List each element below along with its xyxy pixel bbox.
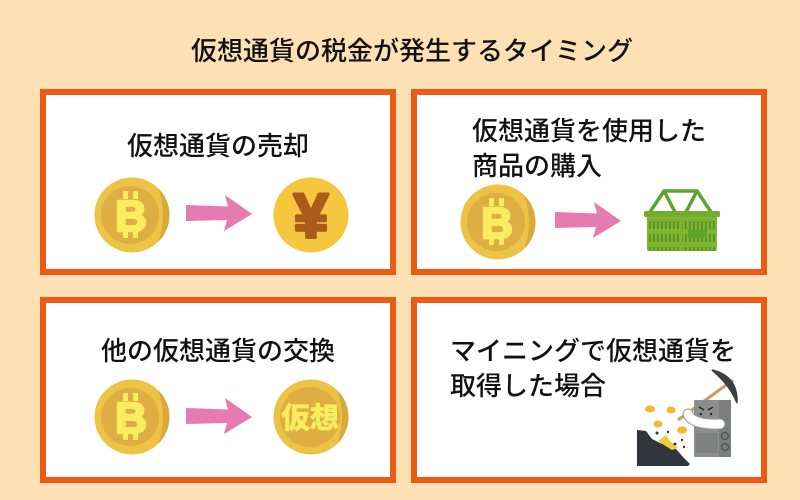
icon: mining computer	[637, 370, 737, 466]
panel: sale of crypto	[43, 92, 393, 272]
panel: purchase of goods: 商品の購入	[472, 151, 602, 181]
panel: exchange for other crypto: 他の仮想通貨の交換	[101, 336, 335, 366]
icon: shopping basket	[644, 191, 720, 251]
panel: sale of crypto: ¥	[294, 182, 329, 251]
panel: mining	[414, 300, 764, 480]
panel: exchange for other crypto	[43, 300, 393, 480]
panel: purchase of goods	[414, 92, 764, 272]
panel: sale of crypto: 仮想通貨の売却	[127, 131, 309, 161]
panel: mining: マイニングで仮想通貨を	[450, 336, 736, 366]
panel: exchange for other crypto: 仮想	[281, 402, 339, 435]
title: 仮想通貨の税金が発生するタイミング	[191, 36, 633, 66]
panel: purchase of goods: 仮想通貨を使用した	[472, 116, 706, 146]
panel: mining: 取得した場合	[450, 371, 606, 401]
